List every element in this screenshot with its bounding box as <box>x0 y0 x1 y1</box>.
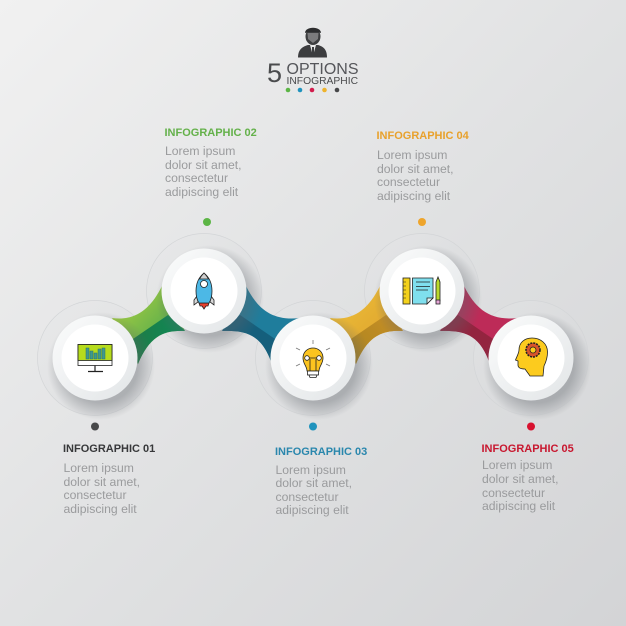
title: options: OPTIONS <box>286 61 359 78</box>
block: infographic 05: consectetur <box>482 486 545 500</box>
block: infographic 03: Lorem ipsum <box>276 463 346 477</box>
block: infographic 05: adipiscing elit <box>482 499 556 513</box>
block: infographic 01: Lorem ipsum <box>64 461 134 475</box>
icon: monitor chart <box>78 344 112 372</box>
block: infographic 03: INFOGRAPHIC 03 <box>275 446 367 458</box>
circle 5: head with gear <box>488 316 574 400</box>
block: infographic 02: consectetur <box>165 171 228 185</box>
block: infographic 01: adipiscing elit <box>64 502 137 516</box>
block: infographic 02: Lorem ipsum <box>165 144 235 158</box>
block: infographic 02: dolor sit amet, <box>165 158 242 172</box>
block: infographic 01: dolor sit amet, <box>64 475 140 489</box>
block: infographic 04: INFOGRAPHIC 04 <box>376 130 470 142</box>
circle 3: light bulb <box>270 316 356 400</box>
header: 5 options infographic <box>267 28 359 92</box>
icon: light bulb <box>296 340 330 378</box>
ribbon: green <box>112 286 185 364</box>
block: infographic 04: Lorem ipsum <box>377 148 447 162</box>
block: infographic 01: INFOGRAPHIC 01 <box>63 443 155 455</box>
block: infographic 02: adipiscing elit <box>165 185 239 199</box>
circle 1: monitor <box>52 316 138 400</box>
block: infographic 03: consectetur <box>276 490 339 504</box>
icon: ruler, note, pencil <box>403 277 440 304</box>
block: infographic 02: INFOGRAPHIC 02 <box>164 127 257 139</box>
block: infographic 04: adipiscing elit <box>377 189 451 203</box>
block: infographic 01: consectetur <box>64 488 127 502</box>
ribbons connecting circles <box>112 286 518 364</box>
icon: head with gear <box>516 338 548 376</box>
colored dots <box>286 88 339 92</box>
shadows under circles <box>47 245 591 420</box>
block: infographic 04: dolor sit amet, <box>377 162 454 176</box>
block: infographic 03 <box>275 422 367 517</box>
block: infographic 05: INFOGRAPHIC 05 <box>482 443 574 455</box>
block: infographic 04: consectetur <box>377 175 440 189</box>
icon: rocket <box>194 273 214 309</box>
block: infographic 05: dolor sit amet, <box>482 472 559 486</box>
circle 2: rocket <box>162 248 246 334</box>
circle 4: notes <box>380 248 464 334</box>
ribbon: blue <box>222 286 300 364</box>
halos behind circles <box>38 234 588 416</box>
block: infographic 01 <box>63 422 155 516</box>
block: infographic 05: Lorem ipsum <box>482 458 552 472</box>
subtitle: infographic: INFOGRAPHIC <box>286 76 359 87</box>
ribbon: red <box>440 286 518 364</box>
block: infographic 05 <box>482 422 574 513</box>
big number 5: 5 <box>267 58 282 88</box>
ribbon: yellow <box>330 286 403 364</box>
block: infographic 02 <box>164 127 257 226</box>
block: infographic 03: adipiscing elit <box>276 503 349 517</box>
icon: businessman <box>298 28 327 58</box>
block: infographic 04 <box>376 130 470 226</box>
block: infographic 03: dolor sit amet, <box>276 476 352 490</box>
